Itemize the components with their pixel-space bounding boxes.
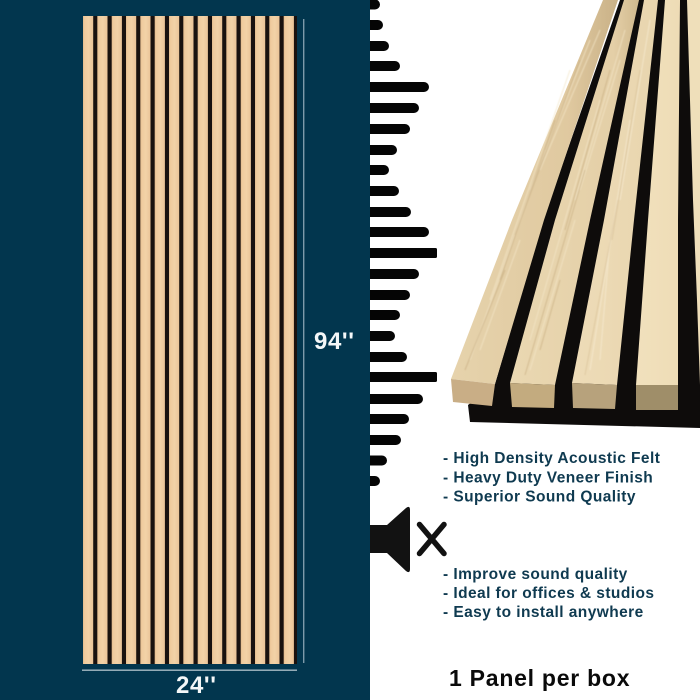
label: quantity per box: 1 Panel per box	[449, 665, 630, 691]
text block: benefits: - Improve sound quality	[443, 566, 628, 583]
label: 24 inch width: 24''	[176, 672, 217, 699]
dimension line: height	[303, 19, 304, 663]
text block: product features: - Superior Sound Quality	[443, 488, 636, 506]
navy background panel	[0, 0, 370, 700]
text block: product features: - Heavy Duty Veneer Finish	[443, 470, 653, 486]
label: 94 inch height: 94''	[314, 328, 355, 355]
slat 4	[636, 0, 680, 410]
felt backing	[468, 0, 700, 428]
slat 5	[687, 0, 700, 385]
panel: front view of slatted acoustic panel	[83, 16, 297, 664]
text block: product features: - High Density Acoustic Felt	[443, 450, 660, 467]
slat 1	[451, 0, 618, 406]
photo: close-up of angled slat panel	[451, 0, 700, 428]
sound wave bars	[360, 0, 437, 486]
navy edge over wave bars	[360, 0, 370, 500]
text block: benefits	[443, 566, 654, 621]
text block: benefits: - Easy to install anywhere	[443, 604, 644, 621]
slat 2	[510, 0, 639, 408]
text block: benefits: - Ideal for offices & studios	[443, 585, 654, 602]
dimension line: width	[82, 670, 297, 671]
text block: product features	[443, 450, 660, 506]
slat 3	[572, 0, 658, 409]
icon: muted speaker	[370, 507, 444, 572]
